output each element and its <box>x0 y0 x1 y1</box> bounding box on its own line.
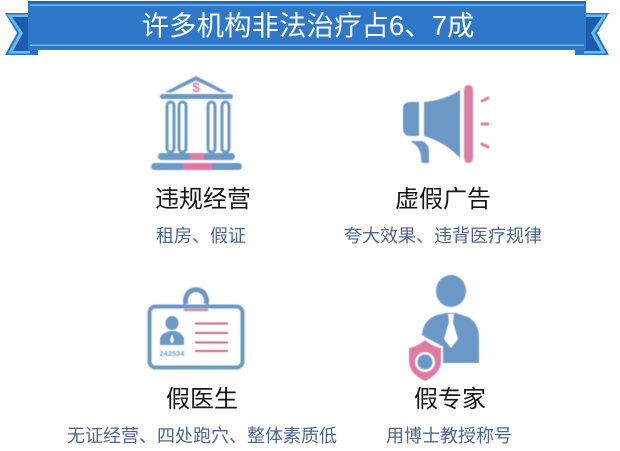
text: 用博士教授称号: 用博士教授称号 <box>386 426 512 446</box>
text: 无证经营、四处跑穴、整体素质低: 无证经营、四处跑穴、整体素质低 <box>67 426 337 446</box>
title banner <box>5 1 609 55</box>
heading: 假专家: 假专家 <box>414 386 486 413</box>
text: 夸大效果、违背医疗规律: 夸大效果、违背医疗规律 <box>344 226 542 246</box>
heading: 违规经营: 违规经营 <box>155 186 251 213</box>
banner title text: 许多机构非法治疗占6、7成 <box>141 10 475 41</box>
heading: 假医生: 假医生 <box>166 386 238 413</box>
text: 租房、假证: 租房、假证 <box>156 226 246 246</box>
icon: bank: $ <box>192 79 200 95</box>
icon: ID card: 242534 <box>159 349 185 358</box>
heading: 虚假广告: 虚假广告 <box>395 186 491 213</box>
